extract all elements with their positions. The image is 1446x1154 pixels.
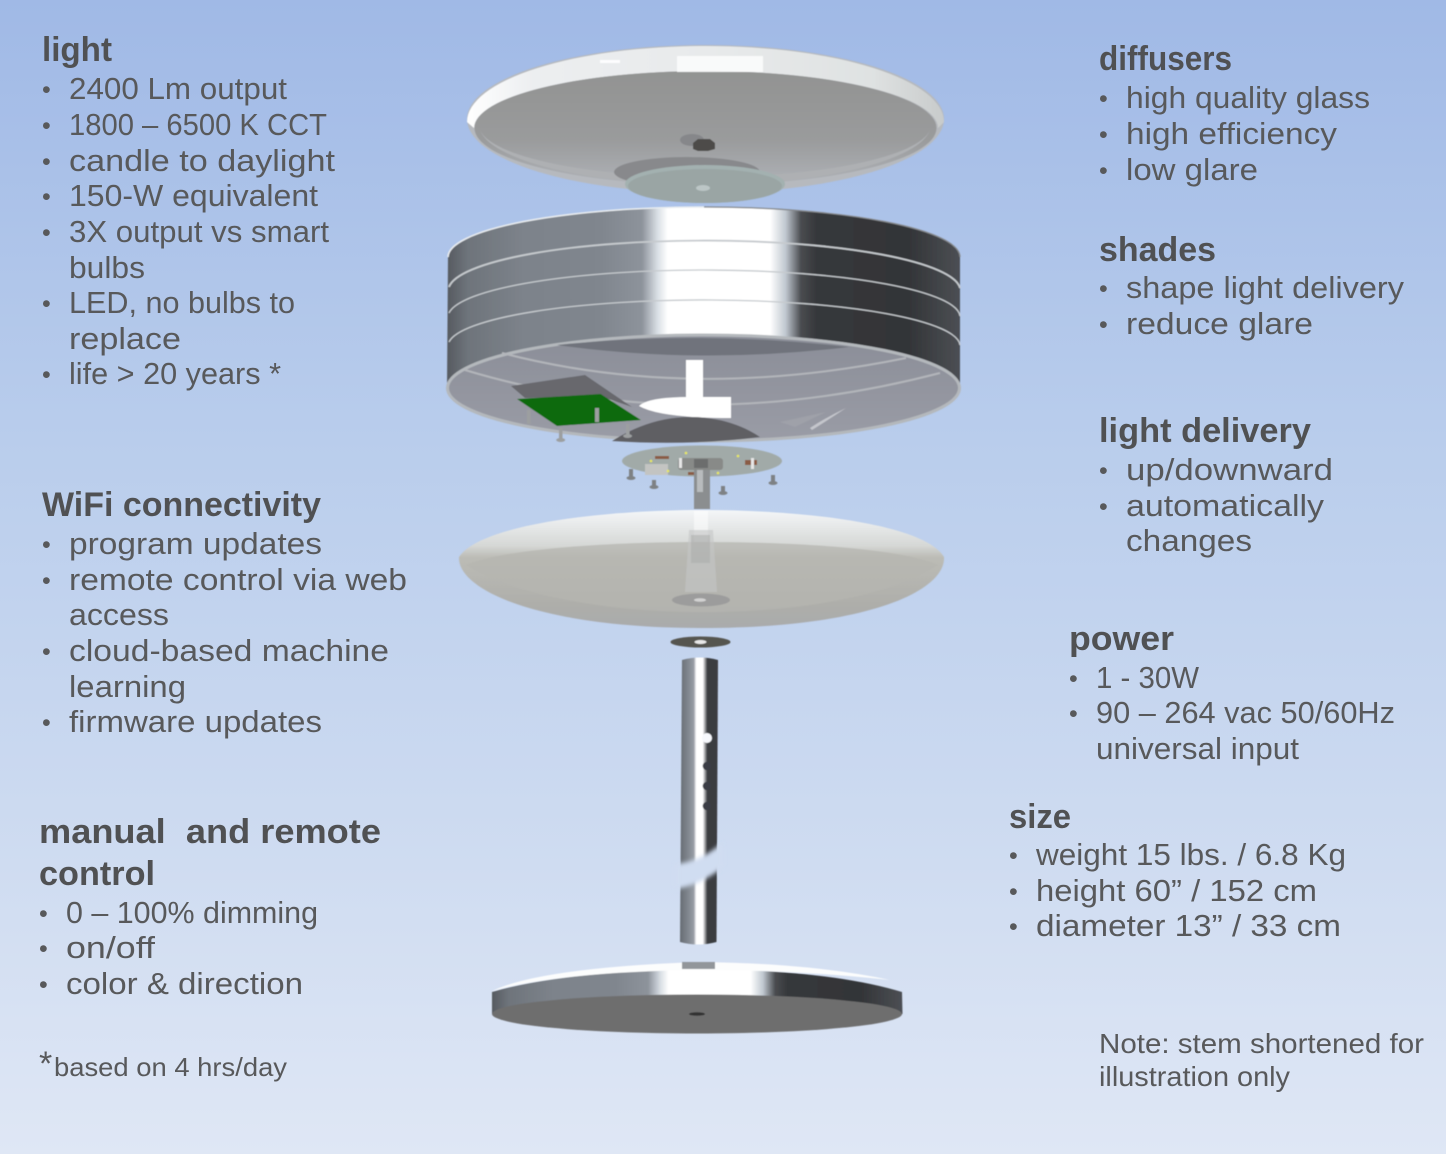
panel: light delivery — [1099, 412, 1333, 558]
washer — [670, 636, 730, 648]
list: diffuser features: • — [1099, 121, 1108, 149]
footnote: based on 4 hrs/day: based on 4 hrs/day — [54, 1052, 287, 1082]
list: power specs — [1069, 660, 1395, 766]
reflector disc — [625, 165, 785, 203]
list: delivery features — [1099, 452, 1333, 558]
list: diffuser features — [1099, 80, 1370, 187]
list: size specs — [1009, 837, 1346, 943]
note: stem shortened: illustration only — [1099, 1061, 1290, 1092]
heading: shades: shades — [1099, 231, 1216, 269]
list: size specs: diameter 13” / 33 cm — [1036, 908, 1341, 943]
list: power specs: • — [1069, 665, 1078, 693]
list: WiFi features: • — [42, 531, 51, 559]
footnote: based on 4 hrs/day: * — [39, 1045, 52, 1083]
heading: light: light — [42, 31, 112, 69]
base — [492, 962, 902, 1034]
post — [694, 470, 710, 509]
panel: size — [1009, 798, 1346, 943]
list: size specs: weight 15 lbs. / 6.8 Kg — [1035, 837, 1346, 872]
list: delivery features: up/downward — [1126, 452, 1333, 487]
list: WiFi features — [42, 526, 407, 739]
heading: manual and remote control — [39, 813, 381, 893]
panel: WiFi connectivity — [42, 486, 407, 739]
list: WiFi features: cloud-based machine — [69, 633, 389, 668]
list: light specs: 1800 – 6500 K CCT — [69, 107, 327, 142]
lower diffuser — [459, 510, 944, 628]
heading: manual and remote control: control — [39, 855, 155, 893]
list: control features — [39, 895, 318, 1001]
list: WiFi features: access — [69, 597, 169, 632]
heading: size: size — [1009, 798, 1071, 836]
list: size specs: height 60” / 152 cm — [1036, 873, 1317, 908]
list: control features: • — [39, 935, 48, 963]
list: WiFi features: remote control via web — [69, 562, 407, 597]
list: WiFi features: firmware updates — [69, 704, 322, 739]
list: light specs: bulbs — [69, 250, 145, 285]
list: light specs: • — [42, 76, 51, 104]
list: power specs: 1 - 30W — [1096, 660, 1200, 695]
stem — [676, 658, 722, 944]
note: stem shortened: Note: stem shortened for — [1099, 1028, 1424, 1059]
list: WiFi features: program updates — [69, 526, 322, 561]
list: light specs: 150-W equivalent — [69, 178, 318, 213]
panel: diffusers — [1099, 40, 1370, 187]
shade cylinder — [447, 207, 960, 443]
note: stem shortened — [1099, 1028, 1424, 1092]
list: shade features: reduce glare — [1126, 306, 1313, 341]
heading: diffusers: diffusers — [1099, 40, 1232, 78]
list: power specs: universal input — [1096, 731, 1299, 766]
stem holes — [702, 733, 712, 810]
list: delivery features: • — [1099, 493, 1108, 521]
list: shade features — [1099, 270, 1405, 341]
screws — [527, 408, 632, 442]
panel: shades — [1099, 231, 1405, 341]
list: diffuser features: • — [1099, 157, 1108, 185]
list: size specs: • — [1009, 913, 1018, 941]
list: light specs: 2400 Lm output — [69, 71, 287, 106]
list: control features: • — [39, 971, 48, 999]
list: power specs: • — [1069, 700, 1078, 728]
list: size specs: • — [1009, 878, 1018, 906]
list: light specs: • — [42, 148, 51, 176]
panel: light — [42, 31, 335, 391]
list: light specs: candle to daylight — [69, 143, 335, 178]
list: light specs: 3X output vs smart — [69, 214, 329, 249]
list: diffuser features: • — [1099, 85, 1108, 113]
LED screws — [626, 469, 778, 495]
list: power specs: 90 – 264 vac 50/60Hz — [1096, 695, 1395, 730]
list: delivery features: • — [1099, 457, 1108, 485]
panel: power — [1069, 620, 1395, 766]
list: control features: • — [39, 900, 48, 928]
list: light specs — [42, 71, 335, 391]
panel: manual and remote control — [39, 813, 381, 1001]
nut — [680, 134, 715, 151]
list: WiFi features: learning — [69, 669, 186, 704]
list: light specs: • — [42, 219, 51, 247]
list: WiFi features: • — [42, 709, 51, 737]
list: diffuser features: high efficiency — [1126, 116, 1338, 151]
list: diffuser features: high quality glass — [1126, 80, 1370, 115]
list: control features: 0 – 100% dimming — [66, 895, 318, 930]
upper diffuser — [467, 45, 944, 203]
control board — [517, 394, 641, 442]
list: diffuser features: low glare — [1126, 152, 1258, 187]
heading: power: power — [1069, 620, 1174, 658]
LED disc — [622, 446, 782, 509]
list: control features: on/off — [66, 930, 155, 965]
list: shade features: shape light delivery — [1126, 270, 1405, 305]
list: light specs: LED, no bulbs to — [69, 285, 295, 320]
list: light specs: • — [42, 112, 51, 140]
list: WiFi features: • — [42, 567, 51, 595]
list: light specs: • — [42, 290, 51, 318]
heading: WiFi connectivity: WiFi connectivity — [42, 486, 321, 524]
list: WiFi features: • — [42, 638, 51, 666]
shade grooves — [449, 241, 960, 345]
list: light specs: • — [42, 183, 51, 211]
list: light specs: replace — [69, 321, 181, 356]
list: light specs: life > 20 years * — [69, 356, 281, 391]
list: delivery features: automatically — [1126, 488, 1325, 523]
stem break — [676, 843, 722, 889]
list: shade features: • — [1099, 311, 1108, 339]
heading: manual and remote control: manual and remote — [39, 813, 381, 851]
illustration: exploded lamp — [447, 45, 960, 1034]
list: size specs: • — [1009, 842, 1018, 870]
list: shade features: • — [1099, 275, 1108, 303]
list: delivery features: changes — [1126, 523, 1252, 558]
heading: light delivery: light delivery — [1099, 412, 1311, 450]
list: control features: color & direction — [66, 966, 303, 1001]
list: light specs: • — [42, 361, 51, 389]
shade interior — [465, 338, 940, 443]
